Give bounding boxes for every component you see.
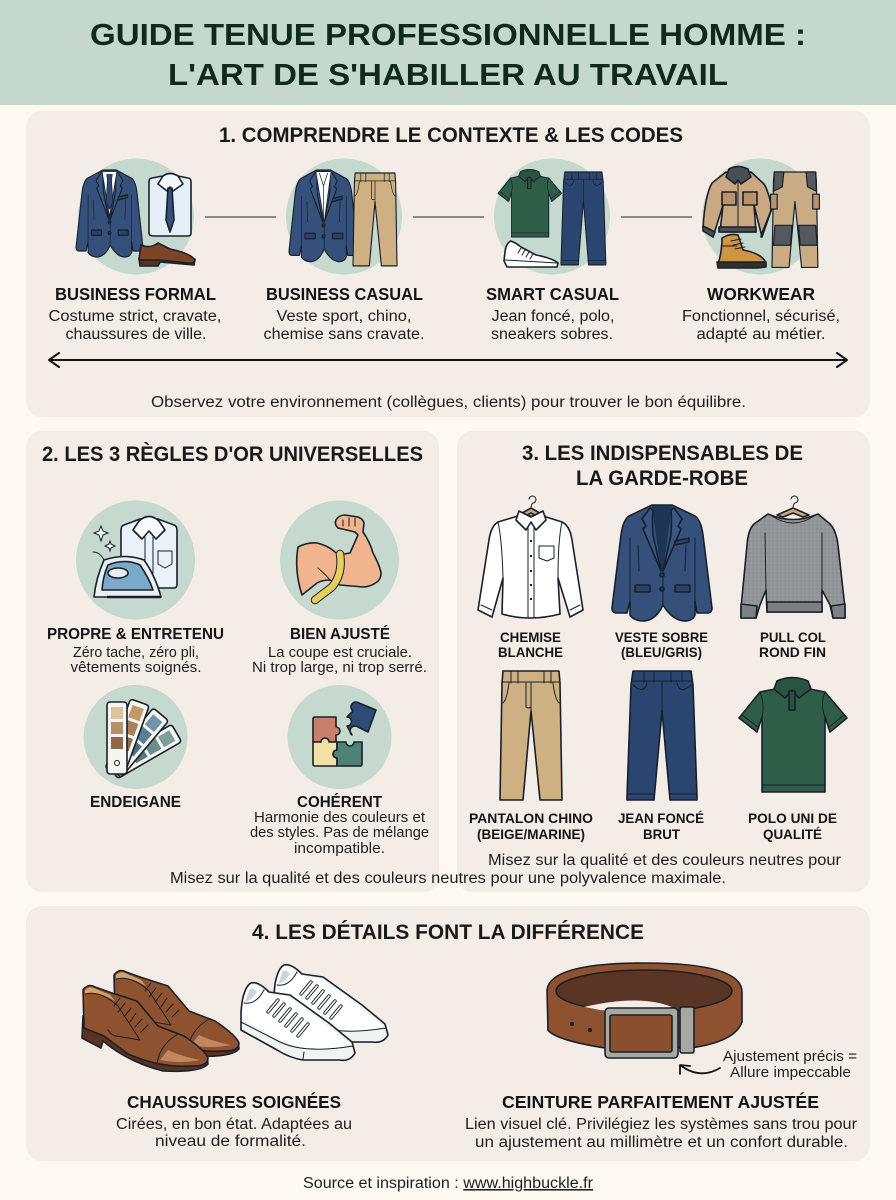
- heading 2: 2. LES 3 RÈGLES D'OR UNIVERSELLES: [42, 441, 423, 466]
- garment: green polo: [739, 678, 847, 792]
- label: veste sobre: VESTE SOBRE: [615, 629, 708, 645]
- garment: dark jeans: [627, 671, 697, 800]
- arrow: to belt: [680, 1065, 720, 1074]
- boot: [718, 234, 765, 264]
- icon: colour swatches: [84, 685, 188, 789]
- description line 2: un ajustement au millimètre et un confort durable.: [475, 1134, 848, 1151]
- label: business casual: BUSINESS CASUAL: [266, 284, 423, 304]
- label: business formal: BUSINESS FORMAL: [55, 284, 216, 304]
- heading 3 line 1: 3. LES INDISPENSABLES DE: [522, 441, 803, 465]
- icon: brown shoes: [82, 971, 239, 1071]
- panel: comprendre le contexte: [26, 111, 870, 417]
- label line 2: ROND FIN: [759, 644, 826, 660]
- icon: workwear outfit: [702, 158, 819, 274]
- description: cohérent: Harmonie des couleurs et: [254, 810, 425, 826]
- label: chemise blanche: CHEMISE: [500, 629, 561, 645]
- description: business casual: Veste sport, chino,: [276, 308, 412, 325]
- header band: [0, 0, 896, 105]
- icon: shirt and iron: [76, 500, 195, 620]
- sneaker: [504, 241, 558, 267]
- label: polo: POLO UNI DE: [748, 810, 837, 826]
- description line 2: niveau de formalité.: [155, 1133, 306, 1150]
- callout: belt fit: [680, 1049, 857, 1081]
- description line 2: chaussures de ville.: [66, 326, 206, 343]
- icon: puzzle: [288, 685, 392, 789]
- description: propre: Zéro tache, zéro pli,: [73, 645, 199, 661]
- note line: Misez sur la qualité et des couleurs neutres pour: [488, 852, 841, 869]
- description line 2: des styles. Pas de mélange: [250, 825, 429, 841]
- description: ceinture: Lien visuel clé. Privilégiez les systèmes sans trou pour: [465, 1116, 857, 1133]
- source line: Source et inspiration : www.highbuckle.fr: [303, 1175, 593, 1192]
- description: smart casual: Jean foncé, polo,: [492, 308, 614, 325]
- callout line 2: Allure impeccable: [730, 1065, 851, 1081]
- title line 2: L'ART DE S'HABILLER AU TRAVAIL: [168, 57, 728, 92]
- label: chaussures: CHAUSSURES SOIGNÉES: [127, 1091, 341, 1112]
- icon: smart casual outfit: [494, 158, 610, 274]
- label: bien ajusté: BIEN AJUSTÉ: [290, 626, 390, 643]
- label: cohérent: COHÉRENT: [297, 794, 383, 811]
- icon: leather belt: [547, 963, 742, 1058]
- heading 1: 1. COMPRENDRE LE CONTEXTE & LES CODES: [219, 123, 683, 147]
- label: pantalon chino: PANTALON CHINO: [469, 810, 593, 826]
- callout: belt fit: Ajustement précis =: [723, 1049, 857, 1065]
- garment: chinos: [500, 671, 562, 800]
- arrow: formality scale: [49, 353, 847, 367]
- icon: business formal outfit: [76, 158, 195, 274]
- panel: détails: [26, 906, 870, 1161]
- garment: grey sweater: [741, 496, 845, 618]
- garment: white shirt: [478, 496, 583, 618]
- label: workwear: WORKWEAR: [707, 284, 815, 304]
- heading 3 line 2: LA GARDE-ROBE: [576, 466, 748, 490]
- label: smart casual: SMART CASUAL: [486, 284, 619, 304]
- description: workwear: Fonctionnel, sécurisé,: [682, 308, 840, 325]
- label: pull: PULL COL: [760, 629, 826, 645]
- heading 4: 4. LES DÉTAILS FONT LA DIFFÉRENCE: [252, 919, 644, 944]
- label line 2: BLANCHE: [498, 644, 563, 660]
- description: chaussures: Cirées, en bon état. Adaptées au: [116, 1116, 352, 1133]
- note spanning panels: Misez sur la qualité et des couleurs neutres pour une polyvalence maximale.: [170, 870, 726, 887]
- label line 2: BRUT: [643, 826, 680, 842]
- panel: règles d'or: [26, 431, 439, 892]
- description line 2: vêtements soignés.: [70, 660, 202, 676]
- description line 2: Ni trop large, ni trop serré.: [252, 660, 427, 676]
- garment: navy jacket: [612, 505, 712, 621]
- icon: arm and tape measure: [280, 500, 399, 620]
- description: bien ajusté: La coupe est cruciale.: [268, 645, 412, 661]
- label: ceinture: CEINTURE PARFAITEMENT AJUSTÉE: [502, 1091, 819, 1112]
- description line 2: adapté au métier.: [696, 326, 826, 343]
- description: business formal: Costume strict, cravate,: [48, 308, 222, 325]
- shoe: [139, 258, 195, 266]
- label line 2: (BLEU/GRIS): [621, 644, 702, 660]
- label: propre: PROPRE & ENTRETENU: [47, 626, 224, 643]
- icon: white sneakers: [241, 965, 388, 1060]
- panel: indispensables: [457, 431, 870, 892]
- note: observe environment: Observez votre environnement (collègues, clients) pour trouver le bon équilibre.: [151, 394, 746, 411]
- label line 2: (BEIGE/MARINE): [477, 826, 585, 842]
- label: jean: JEAN FONCÉ: [618, 810, 704, 826]
- connectors: [205, 216, 692, 218]
- icon: business casual outfit: [286, 158, 402, 274]
- description line 3: incompatible.: [294, 841, 385, 857]
- description line 2: sneakers sobres.: [491, 326, 613, 343]
- title line 1: GUIDE TENUE PROFESSIONNELLE HOMME :: [90, 17, 806, 52]
- label line 2: QUALITÉ: [763, 826, 822, 842]
- description line 2: chemise sans cravate.: [264, 326, 424, 343]
- label: illegible: ENDEIGANE: [90, 794, 181, 811]
